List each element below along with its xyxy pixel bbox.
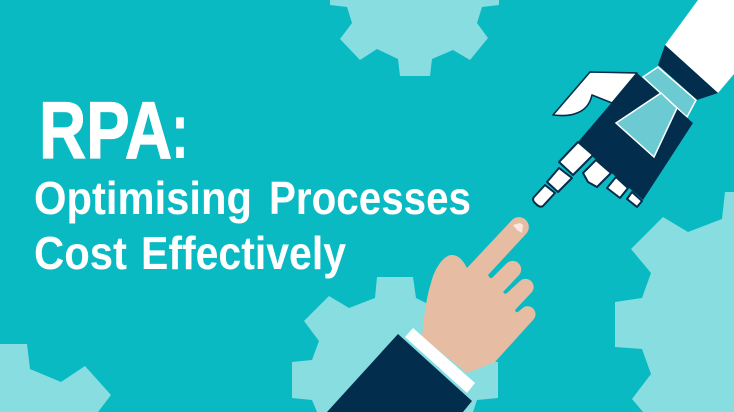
suit sleeve <box>327 334 472 412</box>
subtitle line 2 <box>34 227 346 279</box>
robot thumb <box>553 72 637 116</box>
shirt cuff <box>405 328 475 393</box>
icon: bottom-left gear <box>0 344 111 412</box>
icon: centre gear <box>292 277 498 412</box>
robot cuff <box>658 45 718 100</box>
human hand shape <box>422 217 535 373</box>
icon: right gear <box>615 192 734 412</box>
subtitle line 1: Processes <box>269 172 471 224</box>
subtitle line 2: Effectively <box>141 227 346 279</box>
robot finger 2 <box>583 160 611 187</box>
robot palm panel <box>616 93 677 157</box>
icon: human hand <box>327 217 535 412</box>
icon: robot hand <box>533 0 734 207</box>
robot sleeve <box>665 0 734 93</box>
robot finger 3 <box>607 177 628 198</box>
icon: top gear <box>330 0 499 76</box>
robot wrist <box>643 67 696 117</box>
robot palm <box>578 73 693 200</box>
subtitle line 1 <box>34 172 471 224</box>
title: RPA: : <box>171 86 189 176</box>
subtitle line 2: Cost <box>34 227 127 279</box>
title: RPA: RPA <box>39 86 172 176</box>
robot finger 4 <box>627 192 642 207</box>
robot finger 1 <box>533 142 593 207</box>
fingernail <box>513 223 523 233</box>
title <box>34 86 471 279</box>
subtitle line 1: Optimising <box>34 172 252 224</box>
